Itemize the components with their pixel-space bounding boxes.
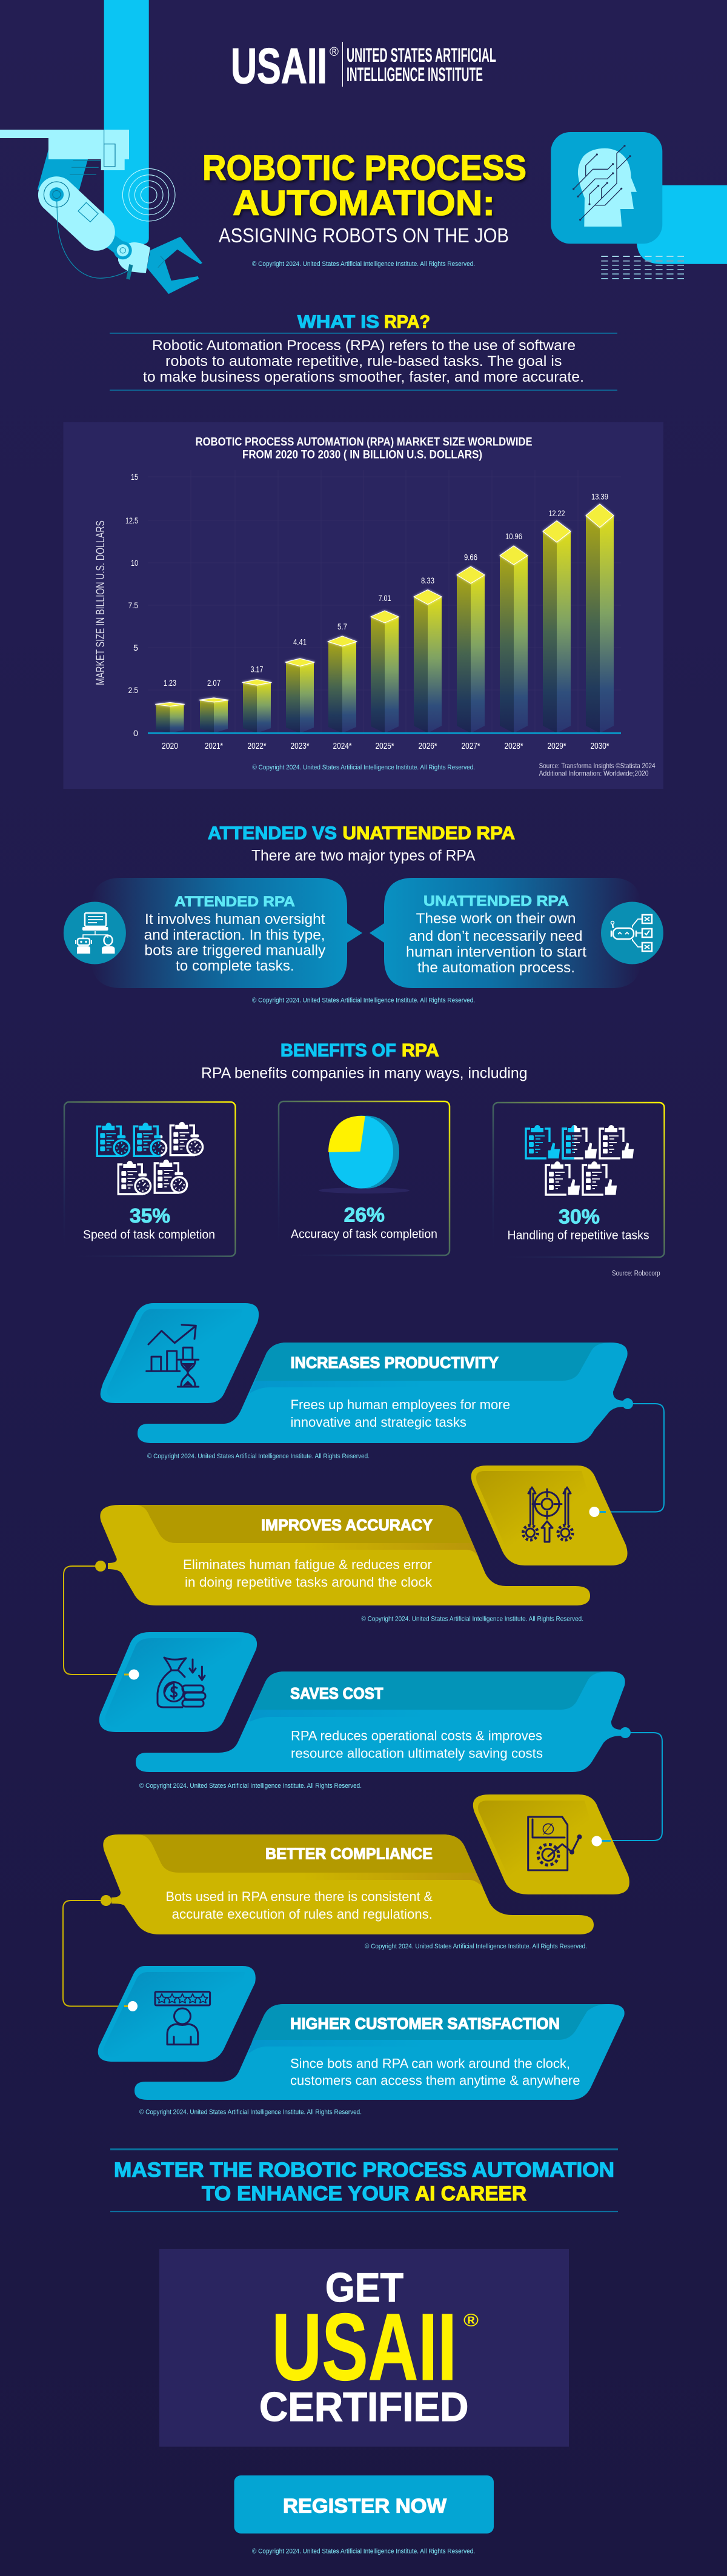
copyright: © Copyright 2024. United States Artificial Intelligence Institute. All Rights Reserved. — [365, 1943, 587, 1950]
x axis labels: 2026* — [418, 741, 437, 751]
card: handling of repetitive tasks: 30% — [559, 1206, 600, 1227]
panel: improves accuracy — [95, 1505, 590, 1605]
panel: get USAII certified — [159, 2249, 569, 2447]
chart footer — [252, 762, 656, 778]
card: speed of task completion — [64, 1102, 235, 1256]
call to action heading: TO ENHANCE YOUR — [202, 2182, 410, 2205]
section: what is RPA: WHAT IS — [297, 312, 379, 332]
x axis labels: 2024* — [333, 741, 352, 751]
section: what is RPA: RPA? — [384, 312, 430, 332]
title — [202, 148, 526, 268]
call to action heading — [110, 2149, 618, 2211]
icon: customer with stars — [155, 1992, 210, 2045]
section: what is RPA: to make business operations smoother, faster, and more accurate. — [143, 369, 584, 385]
card: accuracy of task completion — [279, 1101, 450, 1255]
icon: robot workflow — [601, 901, 663, 964]
copyright: © Copyright 2024. United States Artificial Intelligence Institute. All Rights Reserved. — [139, 2109, 362, 2116]
x axis labels: 2025* — [376, 741, 394, 751]
panel: get USAII certified: CERTIFIED — [259, 2384, 468, 2430]
connector: blue 2 — [597, 1733, 662, 1841]
chart footer: © Copyright 2024. United States Artificial Intelligence Institute. All Rights Reserved. — [252, 764, 475, 771]
connector end dot — [124, 1670, 139, 1679]
copyright: © Copyright 2024. United States Artificial Intelligence Institute. All Rights Reserved. — [147, 1453, 370, 1460]
section: what is RPA: Robotic Automation Process (RPA) refers to the use of software — [152, 337, 576, 354]
panel: attended RPA: to complete tasks. — [176, 958, 294, 974]
card: handling of repetitive tasks: Handling of repetitive tasks — [508, 1229, 649, 1242]
panel: higher customer satisfaction — [134, 2004, 625, 2100]
panel: saves cost: RPA reduces operational costs & improves — [291, 1728, 542, 1744]
bars — [156, 516, 614, 733]
heading: attended vs unattended: There are two major types of RPA — [251, 847, 476, 864]
heading: benefits of RPA: RPA — [402, 1041, 439, 1060]
icon: chart and hourglass — [147, 1325, 199, 1387]
panel: higher customer satisfaction: customers can access them anytime & anywhere — [290, 2073, 580, 2088]
icon: compliance document: ∅ — [542, 1820, 555, 1838]
logo: USAII: UNITED STATES ARTIFICIAL — [347, 44, 496, 66]
value labels: 1.23 — [164, 678, 176, 688]
panel: improves accuracy: in doing repetitive tasks around the clock — [185, 1575, 433, 1590]
y axis labels — [125, 472, 138, 738]
icon: gears and target — [523, 1487, 573, 1542]
value labels: 7.01 — [378, 593, 391, 603]
title: ROBOTIC PROCESS — [202, 148, 526, 188]
heading: benefits of RPA: BENEFITS OF — [281, 1041, 396, 1060]
dashed decoration — [601, 256, 684, 279]
panel: unattended RPA: UNATTENDED RPA — [423, 893, 569, 909]
panel: get USAII certified: ® — [463, 2311, 479, 2331]
heading: attended vs unattended: ATTENDED VS — [208, 823, 337, 843]
title: © Copyright 2024. United States Artificial Intelligence Institute. All Rights Reserved. — [252, 261, 475, 268]
panel: attended RPA: It involves human oversight — [145, 911, 325, 928]
heading: benefits of RPA — [201, 1041, 528, 1082]
tile: accuracy icon — [471, 1466, 628, 1565]
y axis labels: 7.5 — [128, 600, 138, 610]
panel: unattended RPA — [370, 878, 663, 988]
tile: productivity icon — [101, 1303, 259, 1403]
y axis labels: 12.5 — [125, 516, 138, 525]
heading: attended vs unattended: UNATTENDED RPA — [343, 823, 515, 843]
title: AUTOMATION: — [233, 184, 495, 223]
y axis labels: 2.5 — [128, 685, 138, 695]
icon: clipboards with stopwatches — [97, 1122, 203, 1194]
tile: customer satisfaction icon — [98, 1966, 256, 2062]
panel: get USAII certified: USAII — [271, 2294, 457, 2400]
copyright: © Copyright 2024. United States Artificial Intelligence Institute. All Rights Reserved. — [252, 997, 475, 1004]
icon: AI head tile — [551, 132, 727, 264]
panel: unattended RPA: human intervention to start — [406, 944, 586, 960]
panel: increases productivity: INCREASES PRODUCTIVITY — [291, 1353, 499, 1372]
x axis labels: 2029* — [548, 741, 566, 751]
panel: improves accuracy: Eliminates human fatigue & reduces error — [183, 1557, 432, 1572]
tile: cost icon — [99, 1632, 257, 1732]
value labels: 8.33 — [421, 576, 434, 585]
value labels: 13.39 — [591, 492, 608, 502]
y axis labels: 10 — [131, 558, 138, 568]
value labels: 3.17 — [251, 664, 264, 674]
panel: higher customer satisfaction: Since bots and RPA can work around the clock, — [290, 2056, 570, 2071]
copyright: © Copyright 2024. United States Artificial Intelligence Institute. All Rights Reserved. — [252, 2548, 475, 2555]
copyright: © Copyright 2024. United States Artificial Intelligence Institute. All Rights Reserved. — [139, 1782, 362, 1790]
chart footer: Source: Transforma Insights ©Statista 2024 — [539, 762, 656, 770]
robot arm illustration — [0, 0, 202, 294]
icon: clipboards with thumbs up — [526, 1125, 634, 1195]
value labels: 12.22 — [549, 508, 565, 518]
connector: blue 1 — [594, 1404, 664, 1512]
panel: market size chart — [63, 422, 663, 789]
y axis title: MARKET SIZE IN BILLION U.S. DOLLARS — [95, 520, 107, 685]
heading: benefits of RPA: RPA benefits companies in many ways, including — [201, 1065, 528, 1082]
panel: unattended RPA: the automation process. — [417, 960, 575, 976]
value labels — [164, 492, 608, 688]
call to action heading: MASTER THE ROBOTIC PROCESS AUTOMATION — [114, 2159, 614, 2182]
connector end dot — [124, 2001, 138, 2011]
y axis labels: 5 — [133, 643, 138, 652]
icon: money bag — [158, 1658, 205, 1707]
y axis labels: 15 — [131, 472, 138, 482]
panel: attended RPA: ATTENDED RPA — [174, 894, 295, 910]
chart title — [196, 436, 533, 462]
connector: gold 2 — [63, 1900, 133, 2007]
panel: saves cost: resource allocation ultimately saving costs — [291, 1746, 543, 1761]
card: speed of task completion: Speed of task completion — [83, 1229, 215, 1242]
x axis labels: 2022* — [247, 741, 267, 751]
call to action heading: AI CAREER — [415, 2182, 526, 2205]
x axis labels: 2028* — [504, 741, 523, 751]
bar tops — [155, 504, 614, 706]
panel: increases productivity: innovative and strategic tasks — [291, 1415, 466, 1430]
panel: better compliance — [101, 1834, 594, 1934]
logo: USAII — [231, 38, 496, 94]
panel: attended RPA: and interaction. In this type, — [144, 927, 325, 943]
button: register now: REGISTER NOW — [283, 2495, 447, 2517]
value labels: 5.7 — [337, 622, 347, 631]
logo: USAII: ® — [330, 45, 339, 59]
panel: better compliance: BETTER COMPLIANCE — [265, 1845, 433, 1863]
icon: human and robot — [64, 901, 126, 964]
source note: Source: Robocorp — [612, 1270, 660, 1277]
panel: get USAII certified: GET — [325, 2265, 403, 2311]
panel: saves cost — [136, 1671, 631, 1772]
connector end dot — [591, 1836, 611, 1847]
value labels: 4.41 — [293, 637, 307, 647]
card: accuracy of task completion: 26% — [344, 1203, 385, 1226]
section: what is RPA — [110, 312, 617, 390]
y axis labels: 0 — [133, 728, 138, 738]
value labels: 9.66 — [464, 553, 477, 562]
panel: attended RPA — [64, 878, 362, 988]
panel: increases productivity — [138, 1343, 633, 1443]
tile: compliance icon — [473, 1794, 629, 1894]
x axis labels: 2021* — [205, 741, 223, 751]
panel: unattended RPA: These work on their own — [416, 911, 576, 927]
chart title: ROBOTIC PROCESS AUTOMATION (RPA) MARKET SIZE WORLDWIDE — [196, 436, 533, 448]
icon: compliance document — [528, 1817, 581, 1870]
logo: USAII: INTELLIGENCE INSTITUTE — [347, 64, 483, 85]
heading: attended vs unattended — [208, 823, 515, 864]
connector: gold 1 — [64, 1566, 134, 1675]
x axis labels: 2023* — [291, 741, 310, 751]
x axis labels: 2020 — [162, 741, 178, 751]
x axis labels: 2027* — [462, 741, 480, 751]
panel: unattended RPA: and don’t necessarily need — [409, 928, 583, 944]
copyright: © Copyright 2024. United States Artificial Intelligence Institute. All Rights Reserved. — [361, 1616, 583, 1623]
chart title: FROM 2020 TO 2030 ( IN BILLION U.S. DOLLARS) — [242, 449, 482, 462]
panel: better compliance: Bots used in RPA ensure there is consistent & — [166, 1889, 433, 1904]
panel: better compliance: accurate execution of rules and regulations. — [172, 1907, 433, 1922]
connector end dot — [589, 1507, 606, 1517]
panel: higher customer satisfaction: HIGHER CUSTOMER SATISFACTION — [290, 2014, 560, 2033]
card: speed of task completion: 35% — [130, 1204, 170, 1227]
button: register now — [234, 2475, 494, 2534]
card: accuracy of task completion: Accuracy of task completion — [291, 1227, 437, 1241]
value labels: 10.96 — [505, 531, 522, 541]
logo: USAII: USAII — [231, 38, 327, 94]
panel: saves cost: SAVES COST — [290, 1684, 383, 1702]
title: ASSIGNING ROBOTS ON THE JOB — [219, 224, 509, 247]
panel: attended RPA: bots are triggered manually — [144, 943, 325, 959]
panel: increases productivity: Frees up human employees for more — [291, 1397, 510, 1412]
x axis labels — [162, 741, 609, 751]
card: handling of repetitive tasks — [493, 1103, 664, 1257]
panel: improves accuracy: IMPROVES ACCURACY — [261, 1516, 433, 1534]
section: what is RPA: robots to automate repetitive, rule-based tasks. The goal is — [165, 353, 562, 370]
chart footer: Additional Information: Worldwide;2020 — [539, 769, 649, 778]
pie chart — [319, 1116, 410, 1193]
value labels: 2.07 — [207, 678, 221, 688]
baseline — [148, 732, 621, 734]
x axis labels: 2030* — [590, 741, 609, 751]
